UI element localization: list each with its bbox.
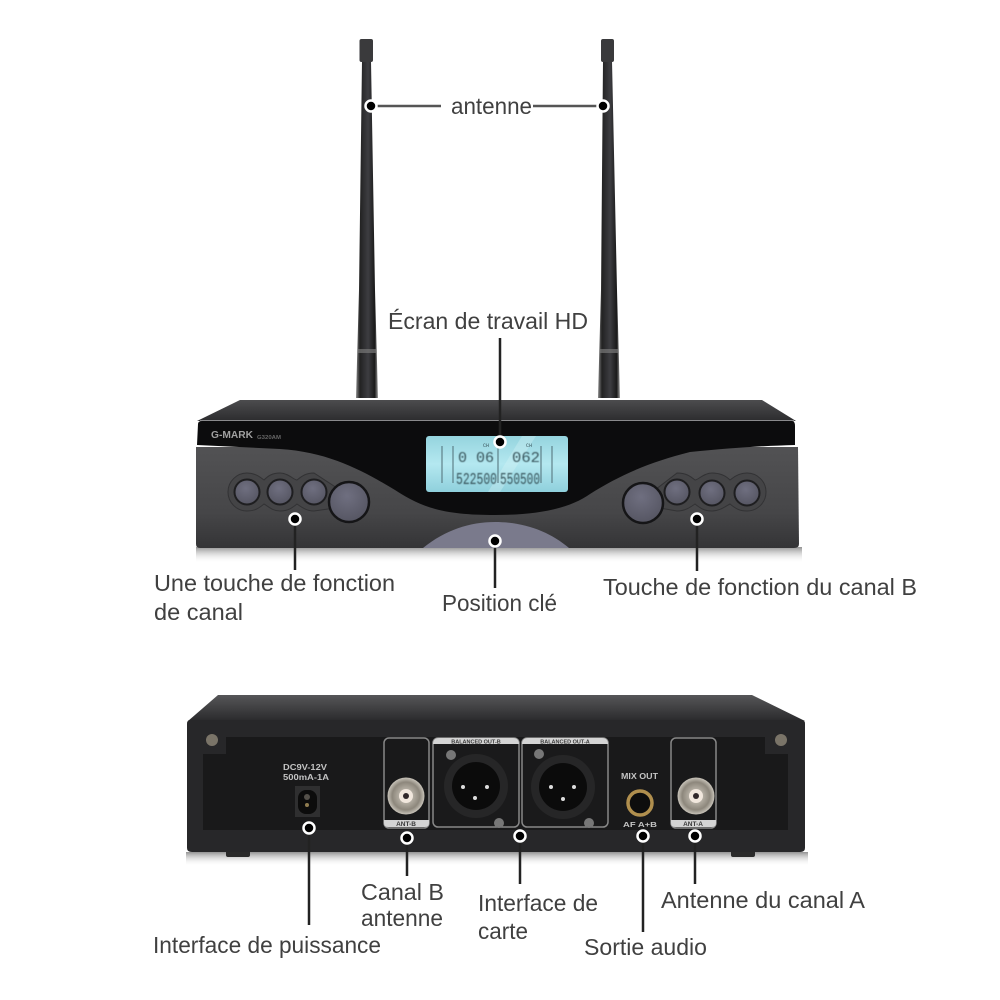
shadow (196, 547, 802, 563)
antenna right (598, 39, 620, 398)
LCD screen: 550500 (500, 471, 540, 490)
face (196, 447, 799, 548)
power socket (283, 762, 329, 817)
balanced out B (433, 738, 519, 828)
callout: power interface: Interface de puissance (153, 932, 381, 958)
LCD screen: 0 06 (458, 450, 494, 467)
callout: card interface (478, 830, 598, 944)
LCD screen: CH (483, 443, 489, 449)
LCD screen: 062 (512, 450, 540, 467)
callout: key position (442, 536, 557, 616)
LCD screen: CH (526, 443, 532, 449)
callout: channel A keys: de canal (154, 599, 243, 625)
callout: card interface: carte (478, 918, 528, 944)
power socket: DC9V-12V (283, 762, 327, 772)
brand text: G-MARK (211, 429, 253, 441)
recessed plate (203, 737, 788, 830)
antenna left (356, 39, 378, 398)
callout: channel B keys: Touche de fonction du canal B (603, 574, 917, 600)
black band and swoop (197, 421, 795, 515)
ANT-B connector (384, 738, 429, 828)
power socket: 500mA-1A (283, 772, 329, 782)
callout: screen: Écran de travail HD (388, 308, 588, 334)
callout: channel A antenna: Antenne du canal A (661, 887, 866, 913)
callout: channel B antenna: Canal B (361, 879, 444, 905)
mix out jack: AF A+B (623, 820, 658, 829)
mix out jack (621, 772, 658, 829)
callout: channel B keys (603, 514, 917, 600)
top surface (188, 695, 805, 721)
callout: channel A antenna (661, 830, 866, 913)
callout: power interface (153, 822, 381, 958)
front panel of receiver (196, 400, 802, 563)
callout: antenne (366, 93, 608, 119)
callout: audio output (584, 830, 707, 960)
balanced out B: BALANCED OUT-B (451, 740, 501, 746)
right function buttons (623, 473, 766, 523)
callout: card interface: Interface de (478, 890, 598, 916)
mix out jack: MIX OUT (621, 772, 658, 781)
rear panel of receiver (186, 695, 808, 866)
callout: screen (388, 308, 588, 448)
callout: channel B antenna: antenne (361, 905, 443, 931)
body (187, 720, 805, 852)
callout: audio output: Sortie audio (584, 934, 707, 960)
left function buttons (228, 473, 369, 522)
balanced out A (522, 738, 608, 828)
screws (206, 734, 218, 746)
LCD screen: 522500 (456, 471, 497, 490)
ANT-B connector: ANT-B (396, 821, 416, 828)
front panel of receiver: G320AM (257, 435, 281, 441)
ANT-A connector (671, 738, 716, 828)
LCD screen (426, 436, 568, 492)
callout: key position: Position clé (442, 590, 557, 616)
bottom centre arc (423, 522, 569, 548)
top surface (197, 400, 796, 421)
callout: antenne: antenne (451, 93, 532, 119)
balanced out A: BALANCED OUT-A (540, 740, 590, 746)
shadow (186, 852, 808, 866)
callout: channel B antenna (361, 832, 444, 931)
ANT-A connector: ANT-A (683, 821, 703, 828)
feet (226, 848, 250, 857)
callout: channel A keys (154, 514, 395, 625)
callout: channel A keys: Une touche de fonction (154, 570, 395, 596)
